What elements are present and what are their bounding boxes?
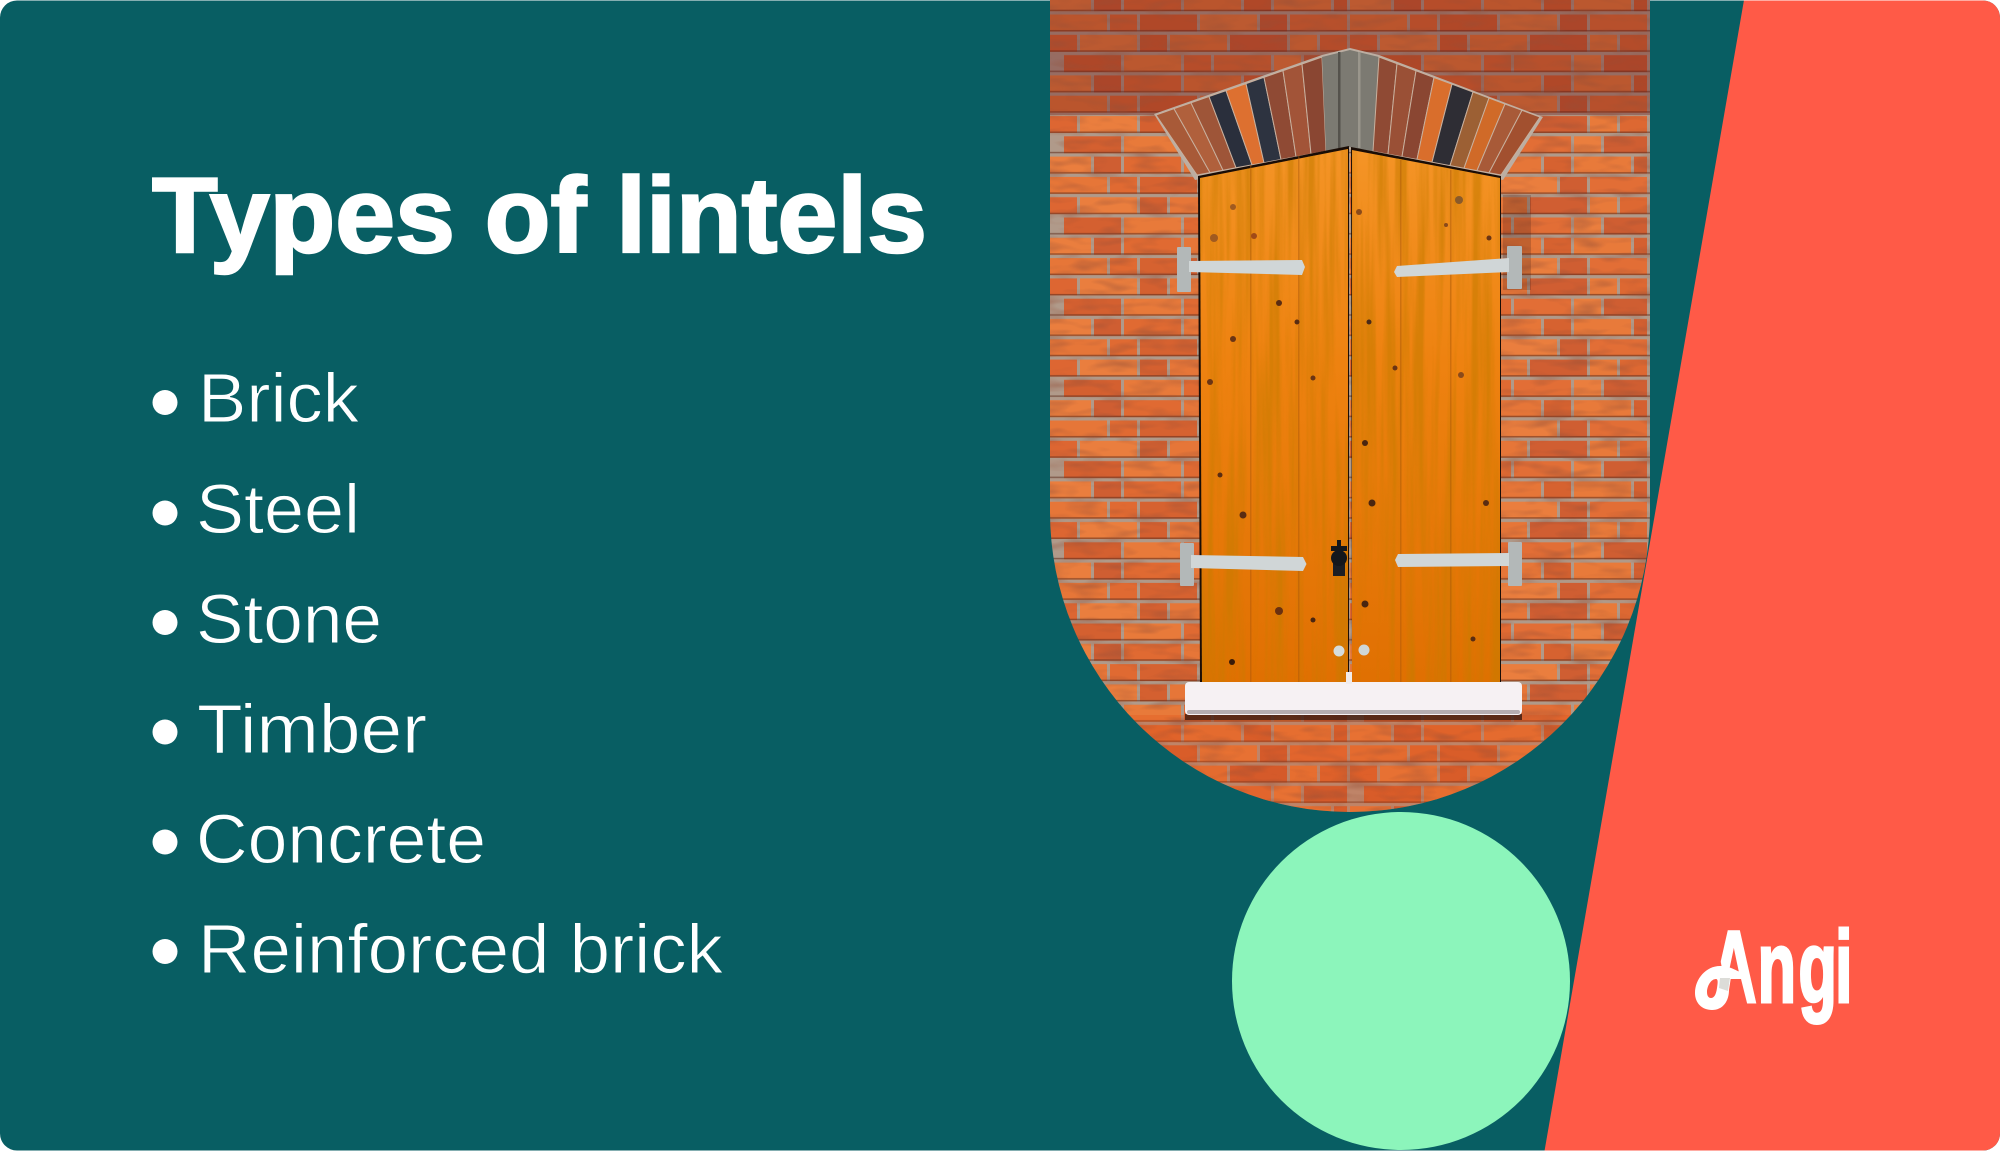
window sill — [1185, 672, 1522, 720]
hinge: top right — [1394, 246, 1522, 289]
list item: Reinforced brick: Reinforced brick — [198, 910, 724, 988]
photo: brick wall with wooden shutters — [1050, 0, 1650, 820]
title: Types of lintels — [152, 155, 927, 275]
hinge: bottom right — [1395, 542, 1522, 586]
list item: Timber: Timber — [197, 690, 427, 768]
Angi logo: Angi — [1711, 909, 1853, 1024]
brick wall — [1050, 0, 1650, 820]
coral diagonal panel — [1544, 0, 2000, 1151]
right shutter — [1351, 147, 1501, 684]
list item: Brick: Brick — [198, 359, 360, 437]
hinge: bottom left — [1180, 543, 1306, 586]
list item: Concrete: Concrete — [196, 800, 486, 878]
hinge: top left — [1177, 247, 1305, 292]
door knocker — [1331, 540, 1347, 576]
door knobs — [1334, 644, 1370, 656]
bulleted list of lintel types — [152, 359, 724, 988]
list item: Stone: Stone — [196, 580, 382, 658]
left shutter — [1198, 146, 1349, 684]
list item: Steel: Steel — [196, 470, 360, 548]
mint circle — [1232, 812, 1570, 1150]
brick arch lintel — [1154, 48, 1543, 180]
